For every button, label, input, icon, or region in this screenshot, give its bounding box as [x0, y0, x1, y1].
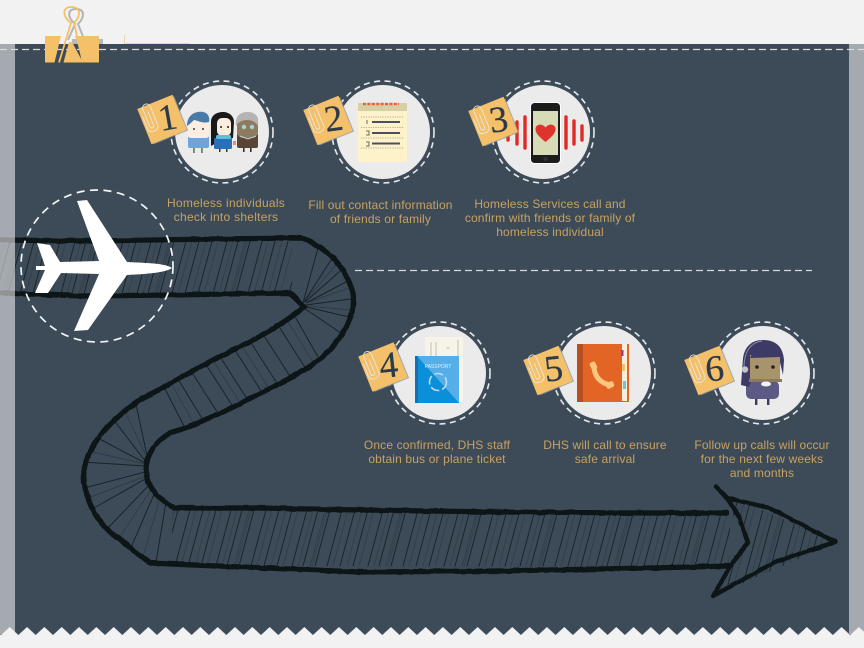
badge circle — [557, 326, 651, 420]
small tan corner mark — [124, 35, 190, 43]
caption 2: of friends or family — [330, 212, 431, 226]
sticky note 2 — [302, 93, 355, 149]
left translucent strip — [0, 44, 15, 634]
dashed ring — [332, 81, 434, 183]
caption 4: obtain bus or plane ticket — [368, 452, 506, 466]
sticky note 4: 4 — [377, 344, 400, 387]
dashed ring — [492, 81, 594, 183]
sticky note 5: 5 — [542, 348, 565, 391]
hatching: bends and diagonal — [88, 249, 351, 560]
sticky note 6 — [683, 343, 736, 399]
sticky note 6: 6 — [703, 348, 726, 391]
caption 3: homeless individual — [496, 225, 604, 239]
badge circle — [496, 85, 590, 179]
step 2 — [302, 81, 453, 226]
right translucent strip — [849, 44, 864, 634]
sticky note 3: 3 — [487, 99, 511, 142]
hatching: final straight section — [172, 509, 730, 567]
icon: airplane — [35, 200, 172, 331]
badge circle — [392, 326, 486, 420]
caption 6: for the next few weeks — [701, 452, 823, 466]
icon: call centre agent — [741, 340, 784, 405]
icon: three people — [187, 112, 258, 153]
dashed ring — [388, 322, 490, 424]
sticky note 3 — [467, 94, 520, 150]
sticky note 1: 1 — [155, 96, 180, 140]
caption 1: check into shelters — [174, 210, 278, 224]
icon: phone with heart — [508, 102, 582, 164]
step 1 — [137, 81, 285, 224]
zigzag bottom edge — [0, 627, 864, 648]
badge circle — [716, 326, 810, 420]
sticky note 4 — [357, 340, 410, 396]
icon: passport and ticket: PASSPORT — [425, 364, 451, 370]
sticky note 2: 2 — [322, 98, 346, 141]
dashed ring — [553, 322, 655, 424]
icon: binder clip — [45, 7, 103, 62]
caption 5: safe arrival — [575, 452, 635, 466]
dashed ring — [171, 81, 273, 183]
step 3 — [465, 81, 636, 239]
hand-drawn route arrow — [0, 237, 837, 596]
sticky note 1 — [137, 93, 189, 148]
step 4 — [357, 322, 511, 466]
arrow outlines — [0, 238, 835, 596]
badge circle — [175, 85, 269, 179]
middle dashed divider — [355, 270, 812, 272]
dashed ring — [21, 190, 173, 342]
airplane badge — [21, 190, 173, 342]
caption 3: Homeless Services call and — [474, 197, 626, 211]
badge circle — [336, 85, 430, 179]
top stitched line — [0, 48, 864, 50]
step 5 — [522, 322, 667, 466]
step 6 — [683, 322, 830, 480]
caption 6: and months — [730, 466, 794, 480]
caption 4: Once confirmed, DHS staff — [364, 438, 511, 452]
hatching: arrow head — [714, 492, 837, 596]
sticky note 5 — [522, 343, 575, 399]
caption 5: DHS will call to ensure — [543, 438, 667, 452]
caption 1: Homeless individuals — [167, 196, 285, 210]
hatching: first straight section — [0, 239, 292, 294]
caption 3: confirm with friends or family of — [465, 211, 636, 225]
dashed ring — [712, 322, 814, 424]
icon: address book — [577, 344, 629, 402]
caption 6: Follow up calls will occur — [694, 438, 830, 452]
icon: notepad — [358, 103, 407, 162]
icon: passport and ticket — [415, 337, 463, 403]
caption 2: Fill out contact information — [308, 198, 453, 212]
